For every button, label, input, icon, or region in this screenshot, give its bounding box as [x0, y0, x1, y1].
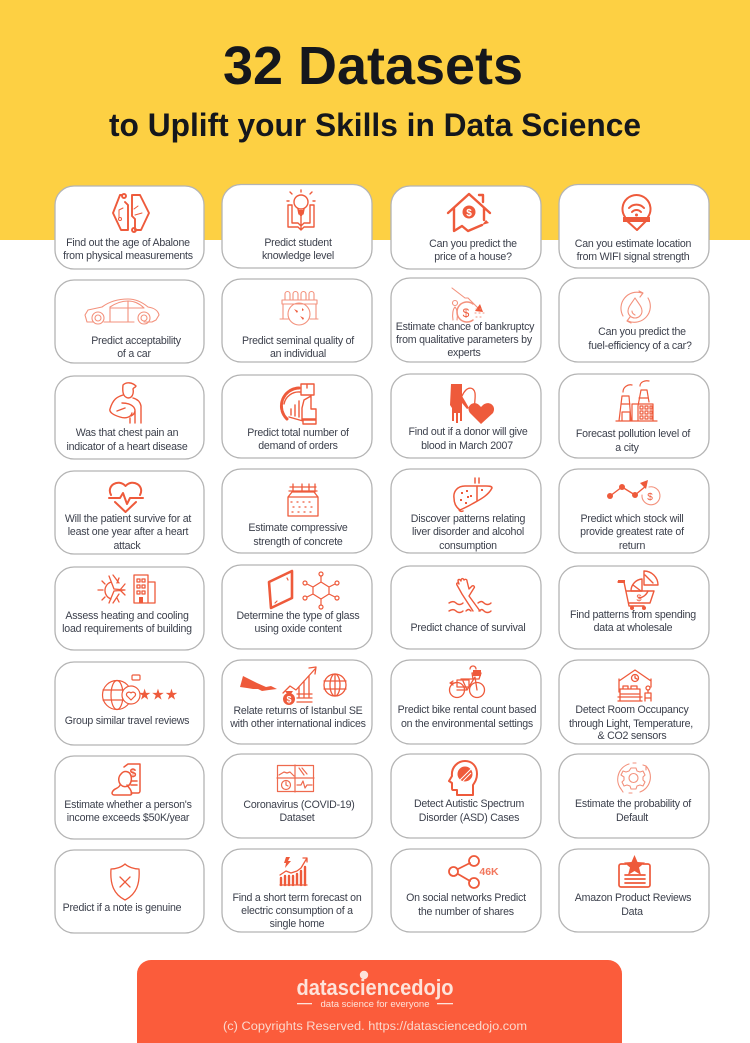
card: demand of orders: [222, 375, 372, 458]
card: Istanbul SE: Relate returns of Istanbul SE: [233, 705, 363, 717]
card: covid: Coronavirus (COVID-19): [243, 799, 355, 811]
card: abalone: Find out the age of Abalone: [66, 237, 190, 249]
icon: bike: [450, 666, 484, 698]
card: social shares: On social networks Predict: [406, 892, 526, 904]
icon: man holding chest: [110, 383, 141, 423]
icon: Istanbul map, money chart, globe: [240, 667, 346, 705]
icon: star document: [619, 855, 650, 887]
card: electric forecast: [222, 849, 372, 932]
card: stock return: Predict which stock will: [580, 513, 684, 525]
card: default probability: Default: [616, 812, 648, 824]
card: concrete: Estimate compressive: [248, 522, 348, 534]
card: pollution: a city: [615, 442, 640, 454]
icon: falling money: [452, 288, 484, 322]
card: blood donor: [391, 374, 541, 458]
icon: globe heart stars: ★★★: [138, 686, 178, 704]
card: room occupancy: through Light, Temperature,: [569, 718, 693, 730]
card: house price: price of a house?: [434, 251, 512, 263]
icon: gear in arrows: [618, 763, 650, 793]
card: car acceptability: [55, 280, 204, 363]
icon: cart and pie: $: [636, 593, 642, 603]
icon: globe heart stars: [102, 675, 178, 710]
card: amazon reviews: Data: [621, 906, 643, 918]
icon: person and dollar document: $: [130, 766, 137, 780]
card: survival: [391, 566, 541, 649]
card: house price: Can you predict the: [429, 238, 517, 250]
card: heart attack survival: attack: [114, 540, 141, 552]
icon: covid dashboard: [277, 765, 314, 792]
card: heart attack survival: [55, 471, 204, 554]
card: heating and cooling: Assess heating and cooling: [65, 610, 189, 622]
card: liver: consumption: [439, 540, 497, 552]
card: chest pain: Was that chest pain an: [76, 427, 179, 439]
card: autism: Disorder (ASD) Cases: [419, 812, 519, 824]
icon: head: [449, 761, 477, 795]
card: fuel efficiency: fuel-efficiency of a car?: [588, 340, 692, 352]
card: electric forecast: electric consumption of a: [241, 905, 353, 917]
footer panel: [137, 960, 622, 1043]
icon: bulb and book: [287, 190, 315, 230]
card: seminal quality: Predict seminal quality of: [242, 335, 354, 347]
copyright: (c) Copyrights Reserved. https://datasciencedojo.com: [223, 1019, 527, 1033]
card: pollution: Forecast pollution level of: [576, 428, 690, 440]
card: default probability: [559, 754, 709, 838]
card: wifi location: Can you estimate location: [575, 238, 692, 250]
card: income: Estimate whether a person's: [64, 799, 192, 811]
card: abalone: from physical measurements: [63, 250, 193, 262]
card: demand of orders: Predict total number of: [247, 427, 349, 439]
subtitle: to Uplift your Skills in Data Science: [109, 107, 641, 143]
card: seminal quality: an individual: [270, 348, 326, 360]
card: room occupancy: Detect Room Occupancy: [575, 704, 689, 716]
icon: gear chart hand: [281, 384, 316, 424]
icon: recycling drop: [621, 291, 650, 323]
card: bike rental: Predict bike rental count based: [398, 704, 537, 716]
card: house price: [391, 186, 541, 269]
icon: concrete block: [288, 484, 318, 516]
logo: [296, 971, 454, 1010]
card: glass type: using oxide content: [254, 623, 342, 635]
card: heart attack survival: Will the patient survive for at: [65, 513, 191, 525]
card: student knowledge: [222, 184, 372, 268]
card: social shares: the number of shares: [418, 906, 514, 918]
icon: share with 46K: [449, 856, 499, 888]
icon: shield with cross: [111, 864, 139, 900]
card: seminal quality: [222, 279, 372, 362]
icon: energy chart: [280, 857, 307, 885]
card: income: income exceeds $50K/year: [67, 812, 190, 824]
card: glass type: [222, 565, 372, 649]
yellow header band: [0, 0, 750, 240]
card: bankruptcy: experts: [447, 347, 481, 359]
card: bike rental: on the environmental settings: [401, 718, 533, 730]
icon: abalone hexagon: [113, 194, 149, 232]
card: autism: [391, 754, 541, 838]
card: electric forecast: Find a short term forecast on: [232, 892, 362, 904]
card: student knowledge: Predict student: [264, 237, 332, 249]
card: bike rental: [391, 660, 541, 744]
card: electric forecast: single home: [270, 918, 325, 930]
icon: cart and pie: [618, 571, 658, 610]
card: chest pain: indicator of a heart disease: [66, 441, 188, 453]
card: room occupancy: & CO2 sensors: [598, 730, 666, 742]
icon: liver: [454, 478, 492, 511]
icon: person and dollar document: [112, 764, 140, 795]
card: social shares: [391, 849, 541, 932]
icon: house and bed: [618, 670, 651, 701]
icon: stock line and dollar: $: [647, 492, 653, 503]
icon: drowning hand: [449, 579, 491, 612]
card: liver: Discover patterns relating: [411, 513, 526, 525]
card: heating and cooling: [55, 567, 204, 650]
card: student knowledge: knowledge level: [262, 250, 334, 262]
card: survival: Predict chance of survival: [410, 622, 526, 634]
card: amazon reviews: [559, 849, 709, 932]
logo: datasciencedojo: [296, 975, 454, 1000]
card: wifi location: [559, 184, 709, 268]
card: wholesale spending: Find patterns from spending: [570, 609, 696, 621]
card: pollution: [559, 374, 709, 458]
card: fuel efficiency: Can you predict the: [598, 326, 686, 338]
card: stock return: provide greatest rate of: [580, 526, 684, 538]
card: fuel efficiency: [559, 278, 709, 362]
card: wholesale spending: [559, 566, 709, 649]
card: bankruptcy: [391, 278, 541, 362]
card: covid: Dataset: [280, 812, 315, 824]
icon: share with 46K: 46K: [479, 866, 499, 878]
icon: house: $: [466, 208, 472, 219]
card: covid: [222, 754, 372, 838]
card: liver: [391, 469, 541, 553]
card: genuine note: Predict if a note is genuine: [63, 902, 182, 914]
card: concrete: strength of concrete: [253, 536, 343, 548]
icon: factory: [616, 381, 657, 421]
card: autism: Detect Autistic Spectrum: [414, 798, 524, 810]
card: stock return: [559, 469, 709, 553]
card: car acceptability: of a car: [117, 348, 151, 360]
card: income: [55, 756, 204, 839]
card: travel reviews: [55, 662, 204, 745]
card: blood donor: blood in March 2007: [421, 440, 513, 452]
card: heating and cooling: load requirements of building: [62, 623, 192, 635]
card: wholesale spending: data at wholesale: [594, 622, 673, 634]
card: bankruptcy: from qualitative parameters by: [396, 334, 533, 346]
card: chest pain: [55, 376, 204, 459]
icon: seminal sample: [280, 292, 318, 325]
card: room occupancy: [559, 660, 709, 744]
icon: wifi pin: [622, 195, 650, 230]
card: Istanbul SE: [222, 660, 372, 744]
icon: Istanbul map, money chart, globe: $: [286, 694, 292, 704]
icon: sun snow and building: [98, 575, 155, 603]
card: glass type: Determine the type of glass: [236, 610, 360, 622]
card: stock return: return: [619, 540, 646, 552]
icon: hand and heart: [450, 384, 494, 424]
card: bankruptcy: Estimate chance of bankruptcy: [396, 321, 535, 333]
card: blood donor: Find out if a donor will give: [408, 426, 528, 438]
card: amazon reviews: Amazon Product Reviews: [575, 892, 691, 904]
card: genuine note: [55, 850, 204, 933]
card: wifi location: from WIFI signal strength: [577, 251, 690, 263]
card: liver: liver disorder and alcohol: [412, 526, 524, 538]
icon: car: [85, 299, 159, 324]
title: 32 Datasets: [223, 36, 523, 96]
card: default probability: Estimate the probability of: [575, 798, 691, 810]
card: abalone: [55, 186, 204, 269]
card: heart attack survival: least one year after a heart: [68, 526, 188, 538]
icon: heart pulse: [109, 483, 143, 512]
card: Istanbul SE: with other international indices: [229, 718, 366, 730]
icon: house: [448, 194, 490, 231]
card: car acceptability: Predict acceptability: [91, 335, 182, 347]
icon: glass pane and molecule: [269, 571, 339, 609]
icon: stock line and dollar: [607, 480, 660, 505]
card: travel reviews: Group similar travel reviews: [65, 715, 189, 727]
card: concrete: [222, 469, 372, 553]
card: demand of orders: demand of orders: [258, 440, 338, 452]
icon: falling money: $: [463, 306, 470, 320]
logo: data science for everyone: [320, 999, 430, 1010]
